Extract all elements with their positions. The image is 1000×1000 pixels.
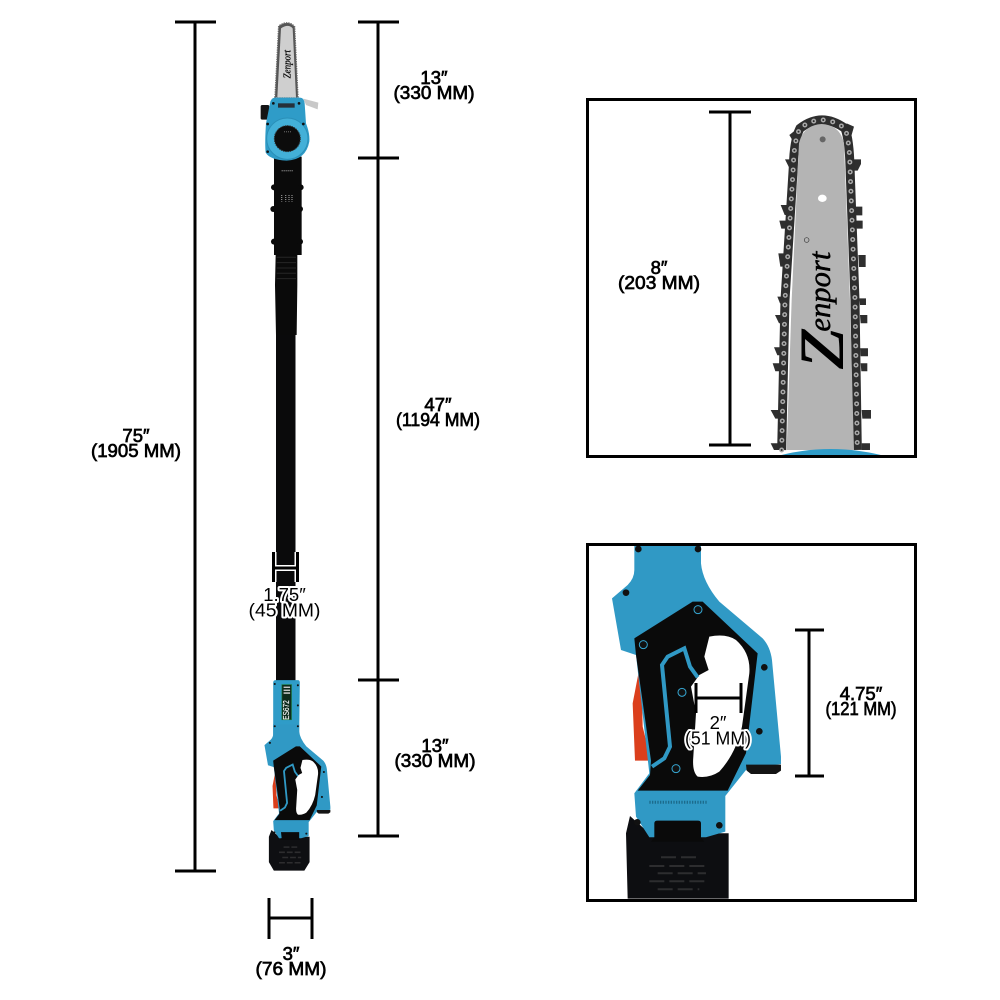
label: middle section (396, 394, 480, 430)
logo initial: Z (789, 329, 857, 369)
vent dots (649, 798, 707, 807)
label: lower section: 13″ (421, 735, 449, 756)
guide bar chain (275, 23, 298, 97)
model text: ES672 (282, 700, 291, 720)
label bars (284, 687, 290, 693)
blue body (264, 724, 330, 838)
model label (282, 685, 292, 720)
dimension: overall length (175, 22, 216, 871)
label: overall length: (1905 MM) (91, 440, 181, 461)
label: bar length (618, 257, 700, 293)
chain outer (782, 120, 857, 450)
black grip (634, 602, 758, 791)
label: grip opening (685, 712, 751, 748)
blue inner stripe (652, 648, 698, 767)
cutter teeth left (771, 128, 801, 450)
battery latch (651, 821, 704, 842)
battery vents (649, 857, 709, 889)
tool: upper saw head and pole sections (261, 23, 318, 335)
label: handle width: 3″ (283, 943, 300, 964)
rivet (820, 136, 826, 142)
label: pole diameter: (45 MM) (248, 600, 320, 620)
panel: handle detail (588, 544, 916, 900)
pole tube (276, 332, 296, 682)
panel border overlay (588, 100, 916, 456)
panel border overlay (588, 544, 916, 900)
label: middle section: 47″ (424, 394, 452, 415)
dimension: handle width (269, 898, 312, 939)
bar hole (818, 195, 827, 202)
handle screws (270, 684, 324, 834)
label: pole diameter: 1.75″ (263, 584, 306, 605)
cutter teeth right (845, 123, 871, 450)
chain rivets (782, 120, 857, 450)
label: lower section: (330 MM) (394, 750, 476, 771)
label: handle width (256, 943, 326, 979)
grip dots (282, 171, 293, 202)
bar logo: Zenport (283, 50, 294, 78)
dimension: handle height (795, 630, 824, 776)
pole (276, 332, 296, 682)
battery foot (317, 810, 330, 814)
label: lower section (394, 735, 476, 771)
panel frame (588, 100, 916, 456)
blue motor housing (265, 98, 309, 161)
blue body (612, 545, 781, 837)
panel: chain bar detail (588, 100, 916, 457)
pole housing bumps (270, 184, 304, 245)
dimension: section lengths (358, 22, 399, 836)
collar ribbing (277, 257, 296, 279)
flag (303, 99, 318, 109)
blue neck (273, 680, 300, 739)
label: grip opening: (51 MM) (685, 728, 751, 748)
label: grip opening: 2″ (710, 712, 727, 733)
chain bar (771, 120, 890, 457)
side knob (261, 105, 269, 120)
black grip (273, 746, 321, 820)
battery foot (746, 765, 781, 774)
label: pole diameter (248, 584, 320, 620)
battery vents (279, 847, 302, 863)
label: handle height: 4.75″ (840, 683, 883, 704)
dimension: pole diameter line (274, 552, 298, 582)
red trigger (633, 660, 651, 761)
blue inner stripe (280, 765, 298, 811)
label: upper section: 13″ (420, 67, 448, 88)
lighter ring (267, 118, 308, 159)
battery (626, 816, 729, 899)
logo word: enport (803, 250, 837, 332)
label: handle height: (121 MM) (826, 698, 896, 719)
label: bar length: (203 MM) (618, 272, 700, 293)
battery latch (280, 832, 300, 840)
label: upper section (394, 67, 474, 103)
dimension: grip opening (696, 683, 741, 713)
dimension: bar length (709, 112, 751, 445)
blue housing edge (773, 449, 890, 457)
white opening (691, 636, 749, 777)
red trigger (273, 769, 280, 808)
label: bar length: 8″ (651, 257, 668, 278)
black dial (274, 126, 300, 152)
black screws (623, 546, 768, 829)
panel frame (588, 544, 916, 900)
model plate (278, 103, 295, 108)
white opening (295, 760, 318, 815)
chain link plates (782, 120, 857, 450)
dimension: pole diameter halo (274, 552, 298, 582)
registered mark (804, 238, 809, 242)
label: overall length: 75″ (122, 425, 150, 446)
handle closeup (612, 545, 781, 899)
housing screws (268, 103, 303, 152)
label: overall length (91, 425, 181, 461)
battery (269, 830, 310, 871)
guide bar (277, 26, 296, 97)
label: handle width: (76 MM) (256, 958, 326, 979)
grey bar (787, 124, 854, 450)
tool: lower handle and battery (264, 680, 330, 871)
label: handle height (826, 683, 896, 719)
label: upper section: (330 MM) (394, 82, 474, 103)
pole collar highlight (278, 332, 294, 334)
upper pole housing (274, 157, 302, 335)
dial marks (284, 130, 291, 134)
blue ring screws (639, 606, 702, 773)
label: middle section: (1194 MM) (396, 409, 480, 430)
